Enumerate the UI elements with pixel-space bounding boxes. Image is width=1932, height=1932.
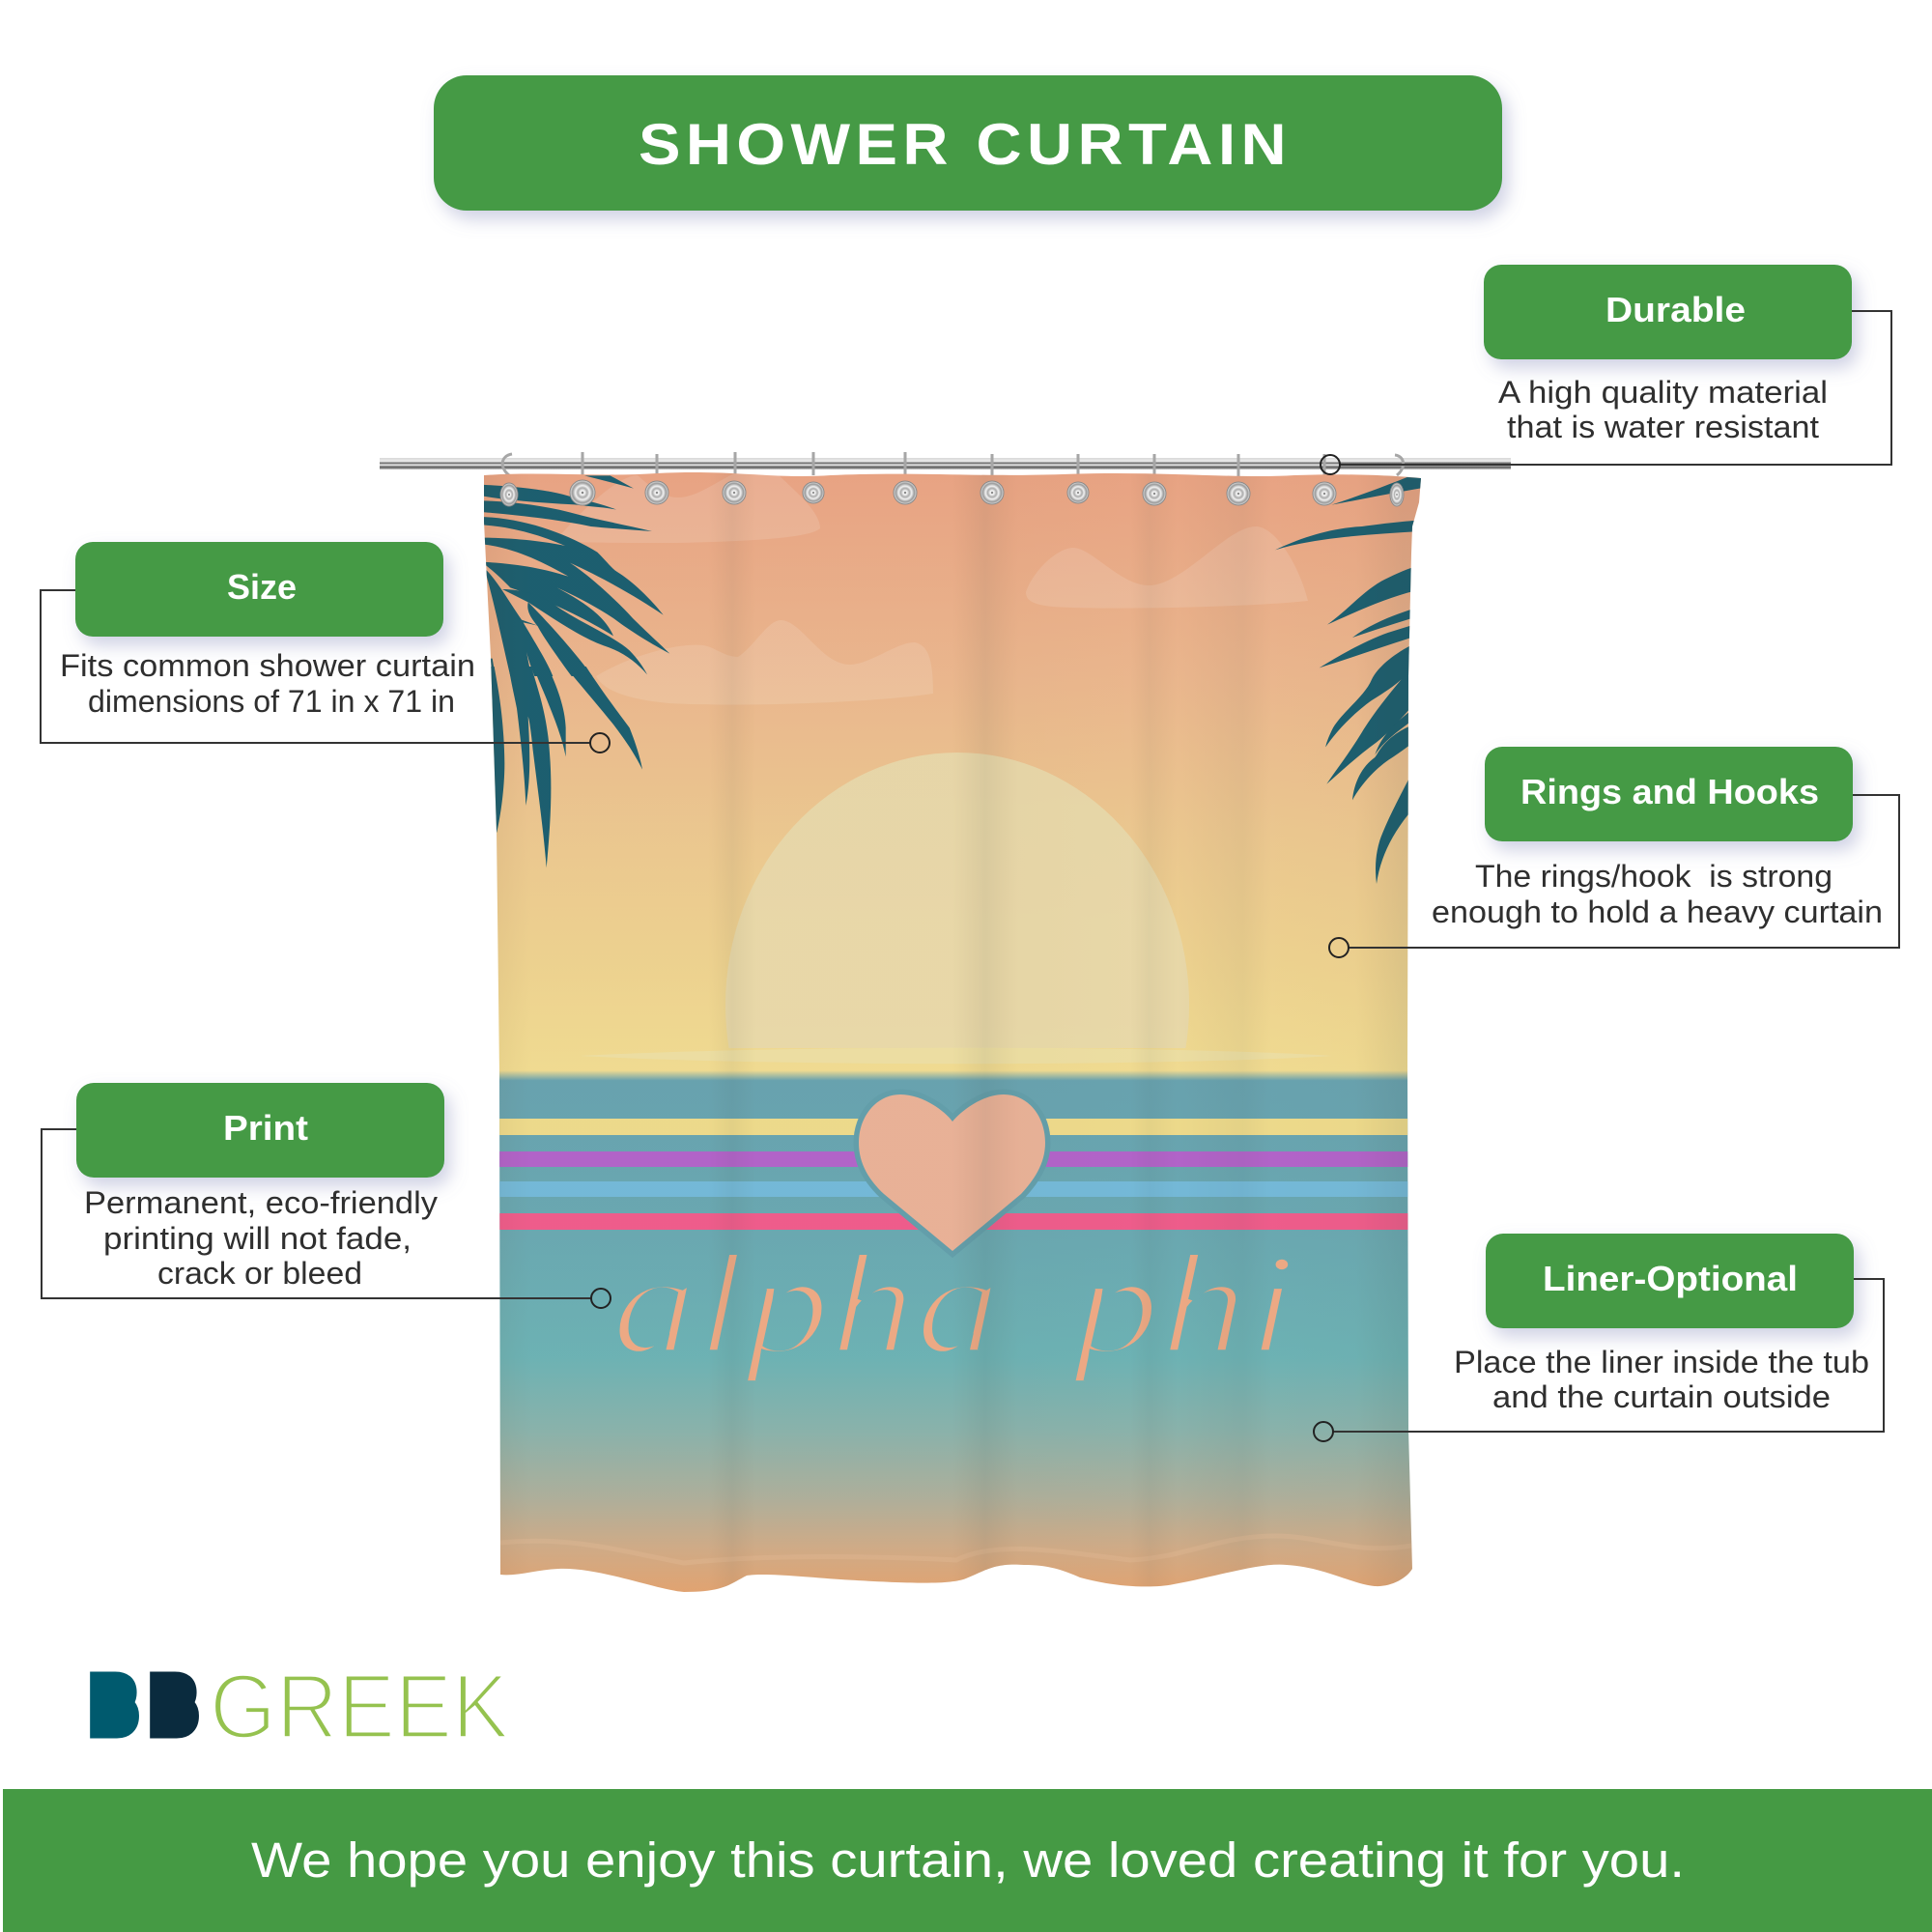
- right palm lower fronds: [1320, 625, 1413, 884]
- fabric folds: [473, 464, 1430, 1599]
- title banner: [434, 75, 1502, 211]
- sun: [725, 753, 1189, 1048]
- callout: size: dimensions of 71 in x 71 in: [88, 684, 455, 719]
- callout: durable: A high quality material: [1498, 375, 1828, 410]
- callout: liner optional: [1314, 1234, 1884, 1441]
- hem: [526, 1534, 1321, 1542]
- callout: print: [42, 1083, 611, 1308]
- callout: liner optional: and the curtain outside: [1492, 1379, 1831, 1414]
- callout: liner optional: Liner-Optional: [1543, 1259, 1798, 1298]
- footer band: [3, 1789, 1932, 1932]
- callout: rings and hooks: [1329, 747, 1899, 957]
- callout: print: Print: [223, 1108, 308, 1148]
- callout: durable: that is water resistant: [1507, 410, 1819, 444]
- logo: BB Greek: B: [93, 1665, 135, 1746]
- left palm upper fronds: [481, 475, 669, 681]
- curtain rod: [380, 458, 1511, 469]
- callout: print: printing will not fade,: [103, 1221, 412, 1256]
- callout: liner optional: Place the liner inside the tub: [1454, 1345, 1869, 1379]
- logo: BB Greek: [93, 1656, 509, 1758]
- logo: BB Greek: B: [153, 1665, 195, 1746]
- shower curtain product: [380, 452, 1511, 1599]
- script text: [620, 1255, 1289, 1381]
- clouds: [555, 473, 1308, 705]
- callout: rings and hooks: Rings and Hooks: [1520, 772, 1819, 811]
- callout: size: Fits common shower curtain: [60, 648, 475, 683]
- callout: print: crack or bleed: [157, 1256, 362, 1291]
- logo: BB Greek: GREEK: [210, 1656, 509, 1758]
- left palm lower fronds: [488, 667, 642, 867]
- sun reflection: [580, 1048, 1333, 1064]
- title banner: SHOWER CURTAIN: [639, 112, 1292, 177]
- callout: rings and hooks: enough to hold a heavy curtain: [1432, 895, 1883, 929]
- footer band: We hope you enjoy this curtain, we loved creating it for you.: [251, 1833, 1685, 1888]
- callout: durable: Durable: [1605, 290, 1746, 329]
- callout: size: Size: [227, 567, 297, 607]
- heart: [859, 1094, 1045, 1251]
- stripes: [483, 1119, 1430, 1230]
- callout: print: Permanent, eco-friendly: [84, 1185, 438, 1220]
- curtain rings: [500, 480, 1404, 506]
- curtain hooks: [502, 452, 1404, 477]
- right palm upper fronds: [1275, 477, 1423, 638]
- callout: rings and hooks: The rings/hook is strong: [1475, 859, 1833, 894]
- callout: size: [41, 542, 610, 753]
- curtain fabric: [473, 464, 1430, 1599]
- callout: durable: [1321, 265, 1891, 474]
